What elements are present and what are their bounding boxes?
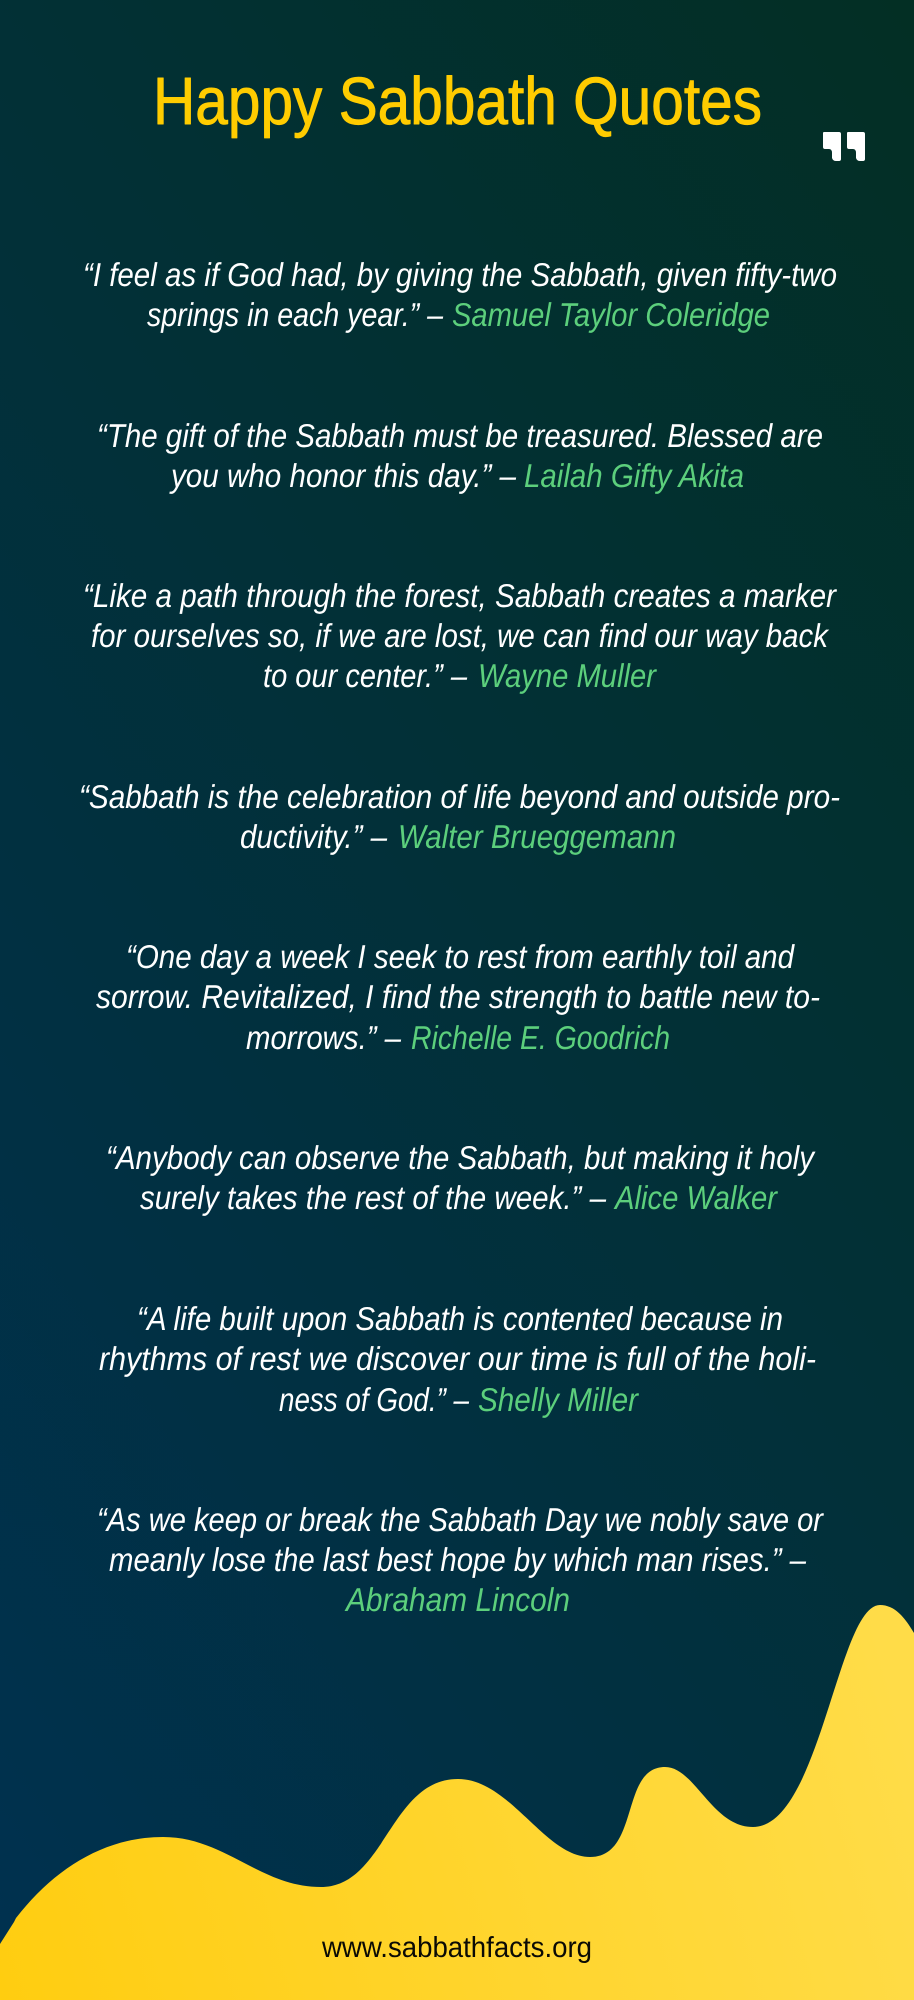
quote 2: Lailah Gifty Akita: “The gift of the Sabbath must be treasured. Blessed are (97, 417, 823, 454)
quote 1: Samuel Taylor Coleridge: Samuel Taylor Coleridge (452, 296, 770, 333)
icon: quotation mark (823, 132, 865, 161)
quote 7: Shelly Miller: ness of God.” – (279, 1381, 470, 1418)
quote 6: Alice Walker: “Anybody can observe the Sabbath, but making it holy (106, 1139, 816, 1176)
quote 7: Shelly Miller: “A life built upon Sabbath is contented because in (137, 1300, 783, 1337)
yellow wave (0, 1605, 914, 2000)
quote 8: Abraham Lincoln (97, 1501, 825, 1618)
quote 4: Walter Brueggemann (79, 778, 840, 855)
quote 7: Shelly Miller: rhythms of rest we discover our time is full of the holi- (99, 1340, 816, 1377)
quote 8: Abraham Lincoln: meanly lose the last best hope by which man rises.” – (109, 1541, 807, 1578)
quote 1: Samuel Taylor Coleridge (83, 256, 837, 333)
quote 2: Lailah Gifty Akita: you who honor this day.” – (169, 457, 517, 494)
footer url: www.sabbathfacts.org (321, 1932, 592, 1964)
quote 4: Walter Brueggemann: “Sabbath is the celebration of life beyond and outside pro- (79, 778, 840, 815)
quote 8: Abraham Lincoln: Abraham Lincoln (344, 1581, 570, 1618)
title: Happy Sabbath Quotes (153, 64, 762, 139)
quote 3: Wayne Muller: for ourselves so, if we are lost, we can find our way back (91, 617, 829, 654)
quote 4: Walter Brueggemann: ductivity.” – (240, 818, 388, 855)
quote 1: Samuel Taylor Coleridge: “I feel as if God had, by giving the Sabbath, given fifty-two (83, 256, 837, 293)
quote 5: Richelle E. Goodrich: “One day a week I seek to rest from earthly toil and (126, 938, 795, 975)
quote 1: Samuel Taylor Coleridge: springs in each year.” – (147, 296, 444, 333)
quote 2: Lailah Gifty Akita (97, 417, 823, 494)
quote 6: Alice Walker (106, 1139, 816, 1216)
quote 3: Wayne Muller: Wayne Muller (478, 657, 658, 694)
quote 7: Shelly Miller: Shelly Miller (478, 1381, 640, 1418)
quote 8: Abraham Lincoln: “As we keep or break the Sabbath Day we nobly save or (97, 1501, 825, 1538)
quote 3: Wayne Muller (83, 577, 838, 694)
quote 5: Richelle E. Goodrich: Richelle E. Goodrich (411, 1019, 670, 1056)
quote 7: Shelly Miller (99, 1300, 816, 1418)
quote 6: Alice Walker: surely takes the rest of the week.” – (140, 1179, 607, 1216)
quote 6: Alice Walker: Alice Walker (613, 1179, 779, 1216)
quote 3: Wayne Muller: to our center.” – (263, 657, 468, 694)
quote 5: Richelle E. Goodrich: morrows.” – (246, 1019, 402, 1056)
quote 4: Walter Brueggemann: Walter Brueggemann (398, 818, 676, 855)
quote 2: Lailah Gifty Akita: Lailah Gifty Akita (524, 457, 744, 494)
quote 3: Wayne Muller: “Like a path through the forest, Sabbath creates a marker (83, 577, 838, 614)
quote 5: Richelle E. Goodrich: sorrow. Revitalized, I find the strength to battle new to- (96, 978, 820, 1015)
quote 5: Richelle E. Goodrich (96, 938, 820, 1056)
